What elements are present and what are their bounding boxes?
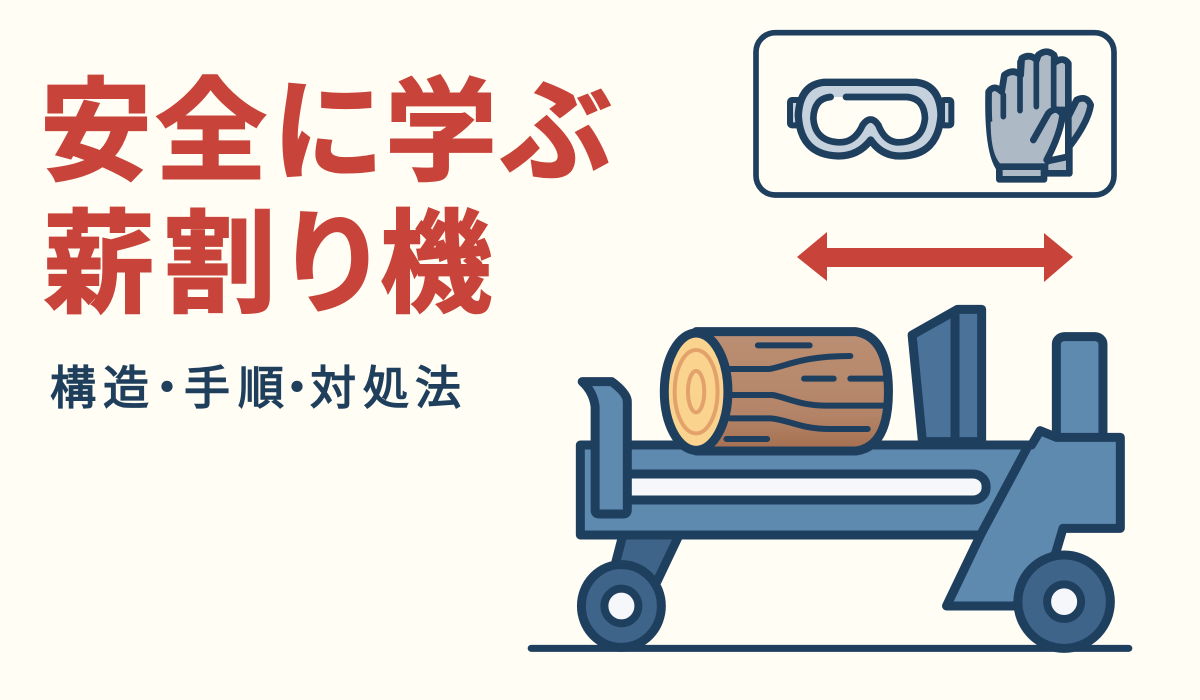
wood grain <box>726 345 884 439</box>
icon: safety goggles <box>790 82 951 156</box>
front wheel <box>581 565 661 647</box>
subtitle: 構造・手順・対処法 <box>50 362 461 414</box>
icon: gloves <box>989 52 1091 179</box>
rear wheel <box>1018 555 1110 648</box>
title: 薪割り機 <box>43 202 492 327</box>
right upright block <box>1056 337 1103 440</box>
arrow: double-headed red <box>797 232 1073 282</box>
wedge <box>912 309 982 442</box>
log end rings <box>664 333 728 450</box>
ground line <box>531 645 1129 652</box>
panel: protective gear <box>756 33 1114 195</box>
log stop plate <box>582 382 627 514</box>
illustration: log splitter <box>531 309 1129 648</box>
title: 安全に学ぶ <box>40 70 612 195</box>
rear wheel strut <box>615 535 679 582</box>
frame beam <box>580 431 1120 606</box>
slot <box>597 474 986 500</box>
log <box>664 332 888 451</box>
title <box>40 70 612 327</box>
